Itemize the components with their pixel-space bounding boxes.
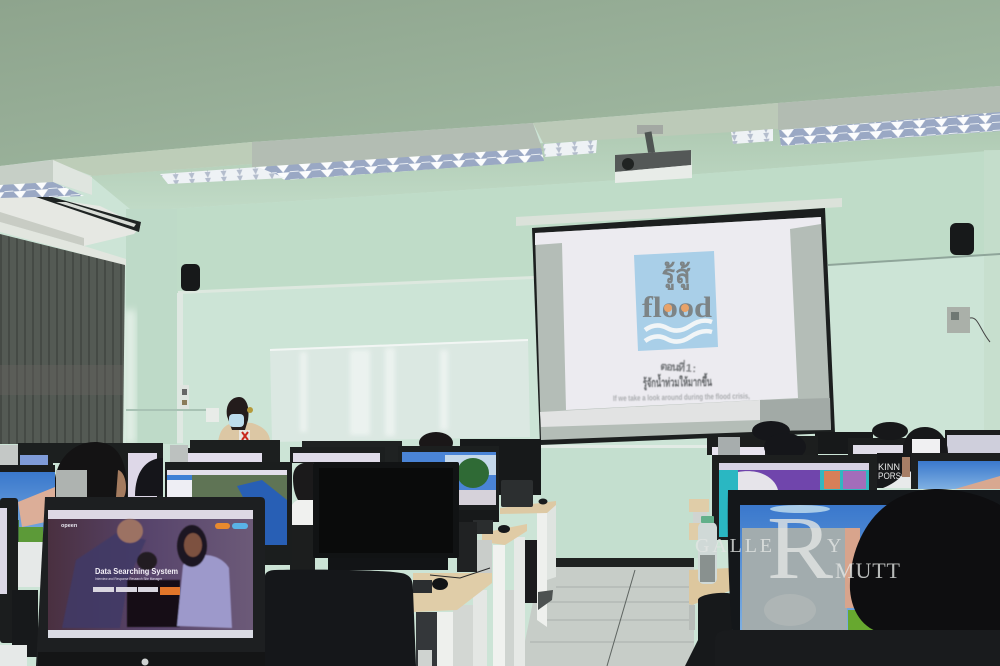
monitor dark rear centre [460,439,541,495]
presenter [218,397,270,442]
search fields [93,587,114,592]
speaker right [950,223,974,255]
pillar wall [126,209,177,444]
screen frame [532,208,835,445]
tall desks right [689,499,732,630]
video controls [760,398,831,431]
rail lines on wall [126,253,1000,443]
lower wall and skirting [541,445,710,567]
monitor with campus photo left [0,465,87,587]
floor tiles [520,567,694,666]
flood logo: flood [642,291,712,324]
slide title: If we take a look around during the flood crisis, [613,392,750,403]
page heading: Data Searching System [95,567,178,576]
poster [877,453,907,488]
desk front with keyboard [413,568,492,666]
paper divider [742,528,847,633]
screen case [516,198,842,226]
page logo: opeen [61,523,78,529]
watermark: MUTT [835,558,901,583]
poster: KINN [878,462,900,472]
microphone sign [239,430,250,442]
poster: PORSC [878,471,907,481]
flood logo: รู้สู้ [662,261,691,291]
slide title: ตอนที่ 1 : [660,358,697,375]
dark towers behind centre monitor [290,522,492,574]
ceiling light right [533,86,1000,146]
monitor with blue desktop far right [911,453,1000,489]
map monitor [165,462,292,565]
back student head centre [419,432,453,454]
whiteboard [270,339,530,442]
chair back centre [265,570,416,666]
desk far with laptop [500,480,556,627]
monitor with campus landscape [398,446,499,522]
back row monitors left [0,440,402,498]
front chairs right [685,593,732,666]
monitor front-left with data searching system page [36,497,265,666]
wall sockets [180,385,219,422]
ceiling light centre [160,123,597,184]
water bottle [698,516,717,584]
upper wall [126,150,1000,300]
beam between lights [50,142,252,176]
right back monitors [707,430,1000,488]
student in front of left monitors [54,442,163,497]
building in wallpaper [845,528,860,608]
student white shirt with dark hair [292,462,313,525]
front monitor right [728,490,1000,640]
watermark: Y [827,535,841,557]
speaker left [181,264,200,291]
monitor front-left with data searching system page: Interview and Response Research Site Manager [95,577,163,581]
projection screen [516,198,842,445]
projector mount and projector [615,125,692,183]
lower ceiling soffit [90,108,1000,209]
watermark: GALLE [695,535,772,557]
header buttons [215,523,230,529]
watermark: R [767,499,833,598]
blank centre monitor [313,462,459,570]
far left monitor edge [0,498,38,666]
desk middle [473,520,527,666]
window blinds [0,222,126,444]
photo figures [62,519,232,628]
watermark [695,499,901,598]
ceiling light left [0,160,92,199]
air conditioner [0,197,141,246]
front student head [850,489,1000,634]
monitor with colourful website [712,455,877,540]
slide page [535,217,821,410]
logo on bezel [142,658,148,666]
bezel ridge [38,652,265,666]
upper ceiling [0,0,1000,166]
flood logo [634,251,718,351]
students right rear [752,421,948,488]
slide title: รู้จักน้ำท่วมให้มากขึ้น [643,372,713,391]
slide title [613,358,750,403]
wall control box [947,307,990,342]
screen surface [535,217,831,440]
front chair back [715,630,1000,666]
